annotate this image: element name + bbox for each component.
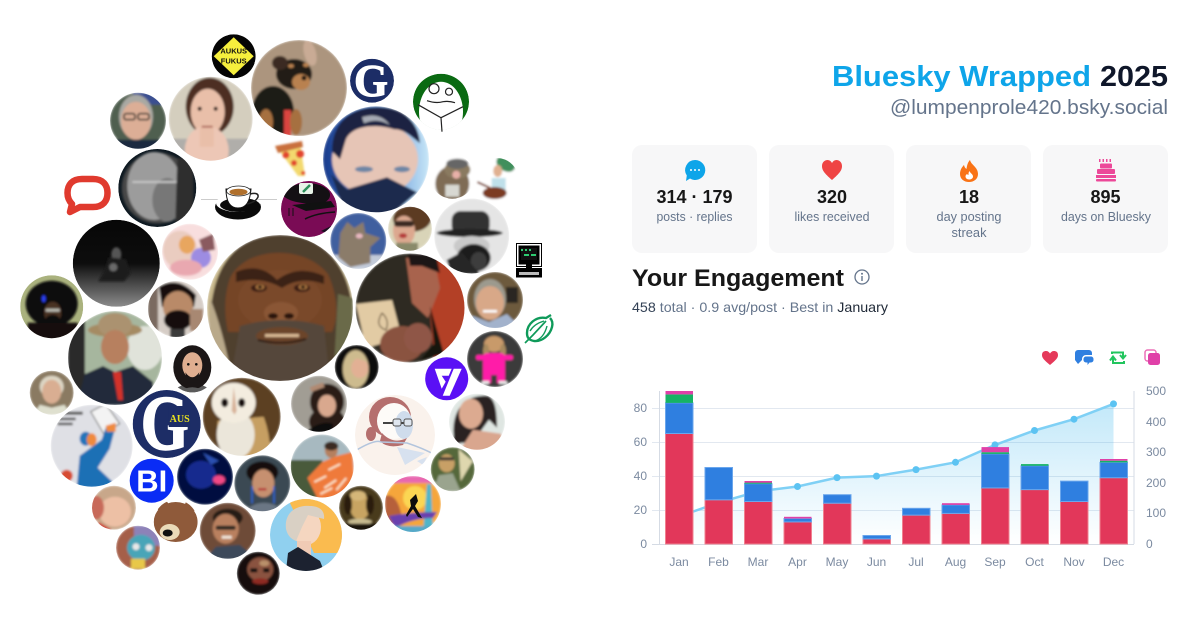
avatar: Guardian AUS logo: G — [141, 379, 189, 466]
avatar: pink cartoon with hat — [162, 224, 218, 280]
icon: heart — [822, 160, 842, 180]
avatar: AUKUS FUKUS sign: FUKUS — [221, 56, 247, 65]
icon: legend quotes — [1145, 350, 1160, 365]
right axis labels: 100 — [1146, 506, 1166, 520]
stat card: posting streak: 18 — [959, 187, 979, 207]
stat card: likes received — [769, 145, 894, 253]
month labels: Mar — [748, 555, 768, 569]
month labels: Jun — [867, 555, 886, 569]
cumulative area — [679, 404, 1114, 544]
avatar: man in black hat and mask — [434, 198, 509, 274]
avatar: Shakespeare portrait — [339, 486, 383, 532]
stacked bars: reposts — [666, 394, 1128, 484]
stat card: posts and replies: 314 · 179 — [656, 187, 732, 207]
stat card: likes received: likes received — [794, 210, 870, 224]
avatar: curly haired woman — [388, 206, 432, 253]
right axis labels: 300 — [1146, 445, 1166, 459]
title: Bluesky Wrapped — [832, 61, 1091, 93]
avatar: purple hat cartoon — [281, 181, 337, 237]
avatar: party creature cartoon — [116, 526, 160, 570]
avatar: painted man — [431, 447, 475, 491]
stat card: posting streak: day posting — [936, 210, 1002, 224]
avatar: horror mask — [237, 552, 280, 595]
month labels: Aug — [945, 555, 966, 569]
avatar: man with beard — [148, 281, 204, 338]
icon: retro computer — [516, 244, 542, 278]
right axis labels: 200 — [1146, 476, 1166, 490]
avatar: bearded cartoon man with glasses — [355, 395, 435, 475]
month labels — [669, 555, 1124, 569]
month labels: May — [826, 555, 848, 569]
engagement chart — [634, 384, 1166, 569]
avatar: BI logo: BI — [136, 464, 167, 499]
stat card: likes received: 320 — [817, 187, 847, 207]
right axis labels: 500 — [1146, 384, 1166, 398]
left axis labels: 20 — [634, 503, 647, 517]
avatar: Guardian AUS logo: AUS — [170, 414, 190, 425]
avatar: BI logo — [130, 459, 174, 503]
icon: birthday cake — [1096, 159, 1116, 182]
avatar: smiling grey haired man — [467, 272, 523, 330]
month labels: Jul — [908, 555, 924, 569]
avatar: long-haired cartoon — [173, 345, 212, 392]
stat card: posts and replies — [632, 145, 757, 253]
stat card: posts and replies: posts · replies — [656, 210, 732, 224]
avatar: man with glasses — [110, 93, 166, 152]
avatar: Vector V logo — [425, 357, 468, 400]
avatar: worker poster — [51, 404, 133, 488]
avatar: toddler — [92, 486, 136, 530]
avatar: puppy on gravel — [251, 39, 347, 138]
engagement summary: 458 total · 0.9 avg/post · Best in January — [632, 299, 888, 315]
avatar: cartoon bear — [154, 500, 198, 544]
avatar: sunset illustration — [385, 476, 441, 534]
avatar: AUKUS FUKUS sign — [212, 34, 256, 78]
stat card: days on Bluesky: 895 — [1090, 187, 1121, 207]
avatar: man with afro — [20, 275, 83, 341]
month labels: Sep — [984, 555, 1006, 569]
handle: @lumpenprole420.bsky.social — [890, 96, 1168, 119]
cumulative line — [679, 400, 1117, 516]
avatar: elderly man — [30, 371, 74, 415]
avatar: grey wolf illustration — [330, 213, 386, 269]
avatar: dark blue portrait with pink lips — [177, 449, 233, 505]
month labels: Nov — [1063, 555, 1085, 569]
avatar: Guardian G: G — [354, 55, 388, 106]
right axis labels — [1146, 384, 1166, 551]
avatar: AUKUS FUKUS sign: AUKUS — [220, 46, 247, 55]
month labels: Oct — [1025, 555, 1044, 569]
chart legend icons — [1042, 350, 1160, 365]
avatar: woman with blue earrings — [234, 455, 290, 513]
right axis labels: 0 — [1146, 537, 1153, 551]
avatar: frog drawing — [413, 74, 469, 132]
icon: green onion logo — [525, 315, 552, 343]
avatar: greyscale bald man — [118, 149, 196, 227]
stat card: days on Bluesky: days on Bluesky — [1061, 210, 1152, 224]
avatar: coffee cup — [201, 186, 277, 220]
avatar: blonde woman on black — [335, 345, 379, 389]
month labels: Jan — [669, 555, 689, 569]
avatar: smiling man with glasses — [200, 503, 256, 561]
avatar: painting of man drawing — [356, 254, 470, 362]
left axis labels: 0 — [640, 537, 647, 551]
left axis and grid — [652, 391, 1134, 544]
avatar: man in bush hat — [68, 311, 163, 405]
engagement heading: Your Engagement — [632, 265, 844, 292]
icon: info — [855, 270, 869, 284]
month labels: Dec — [1103, 555, 1124, 569]
avatar bubble cluster — [20, 34, 552, 595]
icon: legend heart — [1042, 351, 1058, 365]
avatar: barn owl — [203, 378, 281, 459]
icon: legend replies — [1075, 350, 1094, 365]
stat card: posting streak — [906, 145, 1031, 253]
stacked bars: replies — [666, 403, 1128, 539]
avatar: blonde cartoon portrait — [270, 499, 342, 571]
stat card: posting streak: streak — [952, 226, 987, 240]
avatar: masked man with blue hair — [323, 106, 429, 215]
left axis labels — [634, 401, 647, 551]
avatar: woman with dark hair — [291, 376, 347, 436]
left axis labels: 60 — [634, 435, 647, 449]
avatar: woman with brown hair — [168, 76, 253, 161]
month labels: Feb — [708, 555, 729, 569]
avatar: man in orange blanket — [290, 434, 354, 500]
stat card: days on Bluesky — [1043, 145, 1168, 253]
stacked bars: quotes — [666, 391, 1128, 518]
icon: chat bubble — [685, 160, 705, 181]
left axis labels: 80 — [634, 401, 647, 415]
avatar: pizza slice — [275, 141, 305, 176]
title: 2025 — [1100, 61, 1168, 93]
avatar: woman with long dark hair — [449, 394, 505, 452]
avatar: woman in dark photo — [73, 220, 160, 307]
avatar: possum in hat — [434, 157, 472, 199]
avatar: pink suit dog — [467, 331, 523, 387]
right axis labels: 400 — [1146, 415, 1166, 429]
icon: flame — [960, 160, 978, 182]
month labels: Apr — [788, 555, 807, 569]
icon: legend reposts — [1110, 352, 1126, 363]
avatar: hominid reconstruction — [207, 235, 353, 382]
avatar: guitarist cartoon — [476, 158, 516, 200]
left axis labels: 40 — [634, 469, 647, 483]
stacked bars: likes — [666, 434, 1128, 544]
icon: red speech bubble logo — [68, 179, 108, 212]
